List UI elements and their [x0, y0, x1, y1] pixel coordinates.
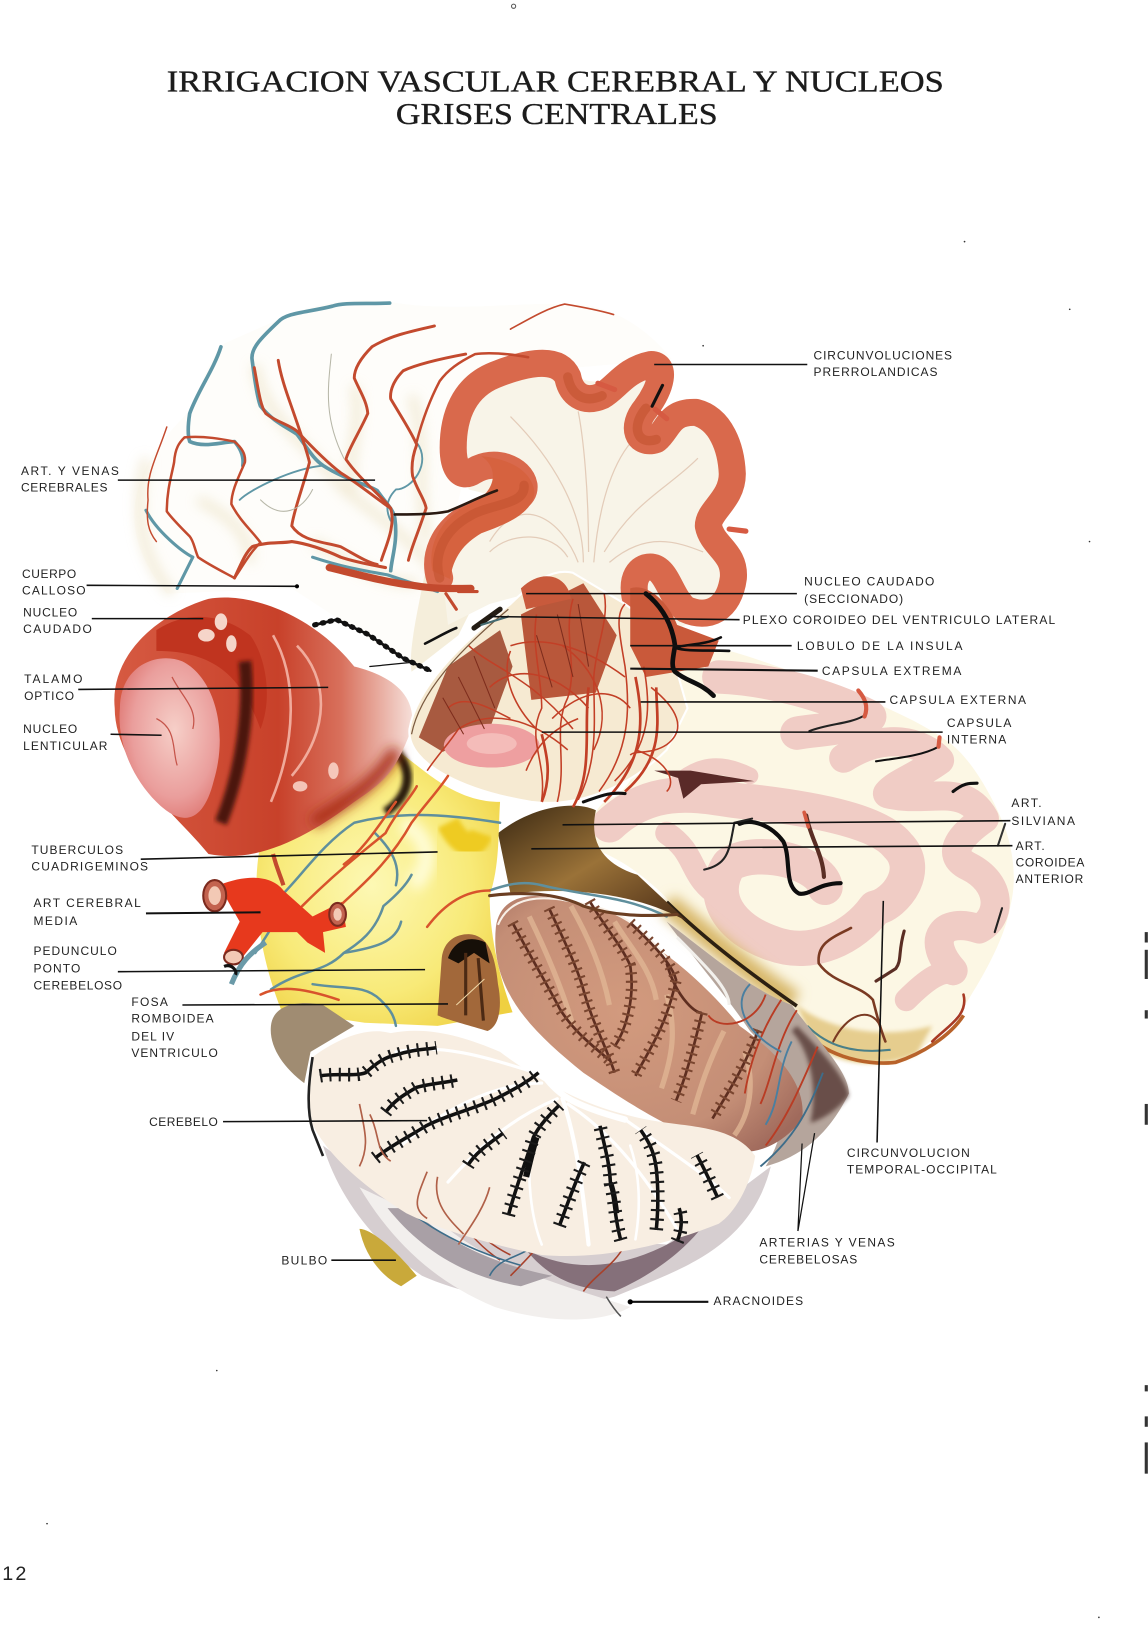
label: plexo coroideo: PLEXO COROIDEO DEL VENTRICULO LATERAL	[743, 613, 1055, 627]
middle cerebral artery	[203, 854, 346, 984]
label: nucleo caudado left	[23, 606, 203, 636]
label: nucleo lenticular: LENTICULAR	[23, 739, 108, 753]
veins, blue	[146, 303, 438, 592]
dark lateral ventricle	[654, 771, 754, 799]
cerebral arteries and veins	[146, 303, 614, 609]
arachnoid and lower cerebellum band	[323, 1146, 771, 1320]
label: art. silviana	[563, 796, 1075, 828]
label: cerebelo: CEREBELO	[149, 1115, 218, 1129]
label: nucleo caudado seccionado	[526, 574, 934, 606]
label: aracnoides: ARACNOIDES	[714, 1294, 803, 1308]
label: talamo optico	[24, 672, 328, 703]
corpus callosum edge, black vein	[315, 620, 430, 671]
title	[167, 65, 944, 131]
label: nucleo caudado seccionado: NUCLEO CAUDADO	[804, 574, 934, 588]
label: fosa romboidea del iv ventriculo: DEL IV	[131, 1029, 174, 1043]
label: nucleo caudado left: NUCLEO	[23, 606, 77, 620]
label: circunvoluciones prerrolandicas	[654, 348, 952, 379]
label: circunvoluciones prerrolandicas: CIRCUNVOLUCIONES	[814, 348, 952, 362]
midbrain dark tissue	[498, 806, 688, 922]
label: art. cerebral media: ART CEREBRAL	[33, 896, 141, 910]
label: cuerpo calloso: CALLOSO	[22, 584, 86, 598]
label: capsula interna: CAPSULA	[947, 716, 1011, 730]
gyrus fold blobs	[431, 456, 534, 579]
label: arterias y venas cerebelosas	[759, 1133, 895, 1266]
label: fosa romboidea del iv ventriculo: FOSA	[131, 995, 168, 1009]
title: GRISES CENTRALES	[396, 97, 718, 131]
cerebral hemisphere surface	[134, 300, 672, 672]
label: art. coroidea anterior: ART.	[1016, 839, 1045, 853]
temporal lobe section	[590, 651, 1014, 1065]
medulla, bulbo	[359, 1229, 417, 1286]
label: plexo coroideo	[490, 613, 1055, 627]
label: lobulo de la insula: LOBULO DE LA INSULA	[797, 639, 962, 653]
brainstem vessels	[255, 776, 677, 1026]
label: circunvolucion temporal-occipital	[847, 901, 997, 1177]
label: talamo optico: OPTICO	[24, 689, 74, 703]
lower cerebellum, white arbor vitae	[309, 1031, 755, 1256]
label: fosa romboidea del iv ventriculo: ROMBOIDEA	[131, 1012, 214, 1026]
cerebral sulci veins	[704, 690, 1005, 1041]
label: pedunculo ponto cerebeloso: PONTO	[33, 962, 80, 976]
label: tuberculos cuadrigeminos: TUBERCULOS	[31, 843, 123, 857]
label: pedunculo ponto cerebeloso: PEDUNCULO	[33, 944, 117, 958]
arteries, red	[147, 304, 614, 609]
label: capsula externa: CAPSULA EXTERNA	[890, 693, 1026, 707]
label: art. silviana: SILVIANA	[1011, 814, 1075, 828]
label: nucleo lenticular	[23, 722, 162, 753]
page number: 12	[2, 1563, 28, 1585]
label: pedunculo ponto cerebeloso: CEREBELOSO	[33, 978, 122, 992]
upper cerebellum, brown folia	[495, 896, 803, 1152]
label: circunvolucion temporal-occipital: TEMPORAL-OCCIPITAL	[847, 1163, 997, 1177]
illustration: brain section	[114, 300, 1014, 1320]
label: nucleo caudado seccionado: (SECCIONADO)	[804, 592, 903, 606]
label: bulbo	[281, 1253, 396, 1267]
label: capsula interna	[542, 716, 1011, 747]
label: capsula interna: INTERNA	[947, 733, 1006, 747]
label: fosa romboidea del iv ventriculo: VENTRICULO	[131, 1046, 218, 1060]
label: fosa romboidea del iv ventriculo	[131, 995, 448, 1060]
label: bulbo: BULBO	[281, 1253, 327, 1267]
label: cuerpo calloso: CUERPO	[22, 567, 76, 581]
title: IRRIGACION VASCULAR CEREBRAL Y NUCLEOS	[167, 65, 944, 99]
cerebellar edge vessels, blue and red	[667, 922, 849, 1166]
pons ovoid, brown	[271, 1003, 354, 1083]
label: circunvoluciones prerrolandicas: PRERROLANDICAS	[814, 365, 937, 379]
label: art. silviana: ART.	[1011, 796, 1042, 810]
thalamus and lenticular mass	[114, 598, 412, 856]
label: tuberculos cuadrigeminos	[31, 843, 438, 874]
label: arterias y venas cerebelosas: CEREBELOSAS	[759, 1252, 857, 1266]
cut vessels in sulci	[598, 383, 746, 531]
label: art. y venas cerebrales	[21, 464, 375, 495]
label: capsula extrema: CAPSULA EXTREMA	[822, 664, 961, 678]
label: nucleo lenticular: NUCLEO	[23, 722, 77, 736]
label: cuerpo calloso	[22, 567, 299, 598]
label: nucleo caudado left: CAUDADO	[23, 622, 92, 636]
label: art. coroidea anterior	[531, 839, 1084, 886]
cortex section with prerolandic gyri	[431, 363, 746, 635]
label: aracnoides	[628, 1294, 803, 1308]
label: art. coroidea anterior: ANTERIOR	[1016, 872, 1084, 886]
label: art. cerebral media: MEDIA	[33, 914, 77, 928]
basal ganglia section with perforating arteries	[409, 572, 719, 807]
label: art. y venas cerebrales: CEREBRALES	[21, 481, 107, 495]
label: talamo optico: TALAMO	[24, 672, 82, 686]
fourth ventricle	[438, 934, 500, 1031]
label: circunvolucion temporal-occipital: CIRCUNVOLUCION	[847, 1146, 970, 1160]
lateral ventricle vein and choroid plexus	[425, 594, 729, 802]
label: pedunculo ponto cerebeloso	[33, 944, 425, 992]
label: art. y venas cerebrales: ART. Y VENAS	[21, 464, 119, 478]
label: art. cerebral media	[33, 896, 261, 928]
label: tuberculos cuadrigeminos: CUADRIGEMINOS	[31, 860, 148, 874]
label: arterias y venas cerebelosas: ARTERIAS Y VENAS	[759, 1236, 895, 1250]
brainstem, yellow	[256, 745, 513, 1026]
cerebellar fringe arteries and veins	[677, 937, 823, 1166]
label: art. coroidea anterior: COROIDEA	[1016, 855, 1084, 869]
